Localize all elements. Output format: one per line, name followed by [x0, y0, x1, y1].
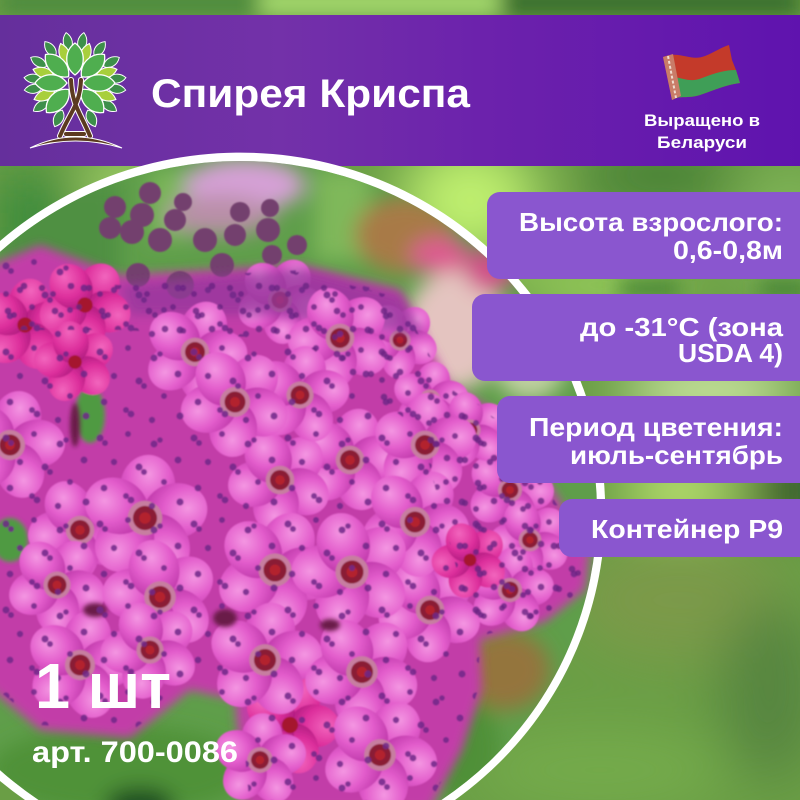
tree crown — [24, 32, 126, 129]
panel: frost hardiness — [472, 294, 800, 381]
panel: flowering period: Период цветения: — [529, 412, 783, 442]
logo: tree — [24, 32, 126, 148]
panel: height: Высота взрослого: — [519, 207, 783, 237]
header band — [0, 15, 800, 166]
panel: frost hardiness: USDA 4) — [678, 338, 783, 368]
stamen dots — [0, 250, 585, 800]
made in Belarus caption: Выращено в — [644, 111, 760, 130]
panel: frost hardiness: до -31°С (зона — [580, 312, 784, 342]
icon: Belarus flag — [663, 45, 740, 100]
title: Спирея Криспа — [151, 72, 471, 116]
panel: height — [487, 192, 800, 279]
panel: container: Контейнер Р9 — [591, 514, 783, 544]
panel: flowering period — [497, 396, 800, 483]
flower mass — [0, 245, 590, 800]
hot pink flowers — [0, 238, 526, 793]
made in Belarus caption — [644, 111, 760, 152]
circular flower photo — [0, 150, 610, 800]
unopened buds — [99, 182, 307, 299]
made in Belarus caption: Беларуси — [657, 133, 747, 152]
main flowers — [0, 287, 438, 800]
tree trunk — [30, 80, 122, 148]
quantity: 1 шт — [35, 650, 171, 722]
dark gaps between flowers — [70, 403, 340, 631]
panel: height: 0,6-0,8м — [673, 235, 783, 265]
white circle frame — [0, 153, 605, 800]
panel: flowering period: июль-сентябрь — [570, 440, 783, 470]
green gaps between flowers — [0, 387, 105, 562]
purple stamen band at crown of cluster — [120, 268, 425, 335]
blurred backdrop of the photo — [0, 159, 565, 800]
dense stamen dots on upper cluster — [0, 272, 585, 620]
back flowers — [228, 258, 568, 663]
panel: container — [559, 499, 800, 557]
article number: арт. 700-0086 — [32, 736, 238, 769]
